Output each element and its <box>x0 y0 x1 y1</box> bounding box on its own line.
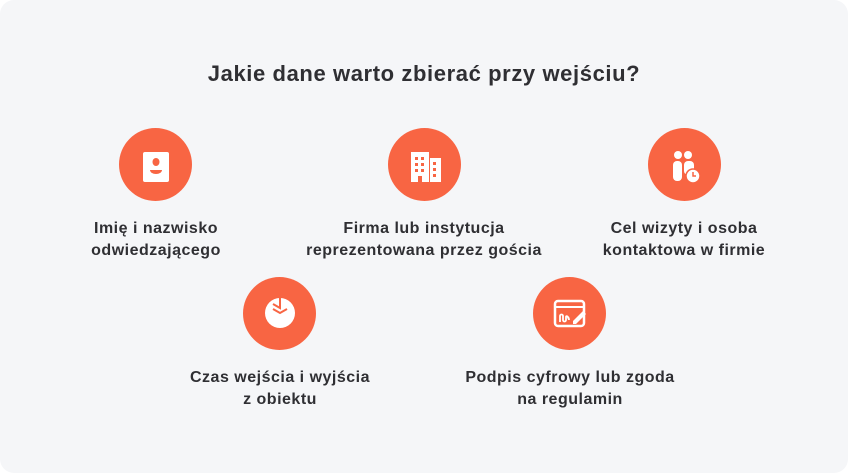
label: purpose: kontaktowa w firmie <box>603 242 765 259</box>
label: purpose: Cel wizyty i osoba <box>611 220 757 237</box>
icon: signature <box>533 277 606 350</box>
label: time: Czas wejścia i wyjścia <box>190 369 370 386</box>
label: time: z obiektu <box>243 391 317 408</box>
label: company: Firma lub instytucja <box>343 220 505 237</box>
icon: person badge <box>119 128 192 201</box>
icon: clock <box>243 277 316 350</box>
title: Jakie dane warto zbierać przy wejściu? <box>208 61 640 86</box>
label: time <box>190 369 370 408</box>
label: purpose <box>603 220 765 259</box>
label: company: reprezentowana przez gościa <box>306 242 542 259</box>
label: signature <box>465 369 675 408</box>
icon: people clock <box>648 128 721 201</box>
label: name: odwiedzającego <box>91 242 221 259</box>
label: company <box>306 220 542 259</box>
label: signature: Podpis cyfrowy lub zgoda <box>465 369 675 386</box>
label: name <box>91 220 221 259</box>
label: signature: na regulamin <box>517 391 623 408</box>
label: name: Imię i nazwisko <box>94 220 218 237</box>
icon: buildings <box>388 128 461 201</box>
